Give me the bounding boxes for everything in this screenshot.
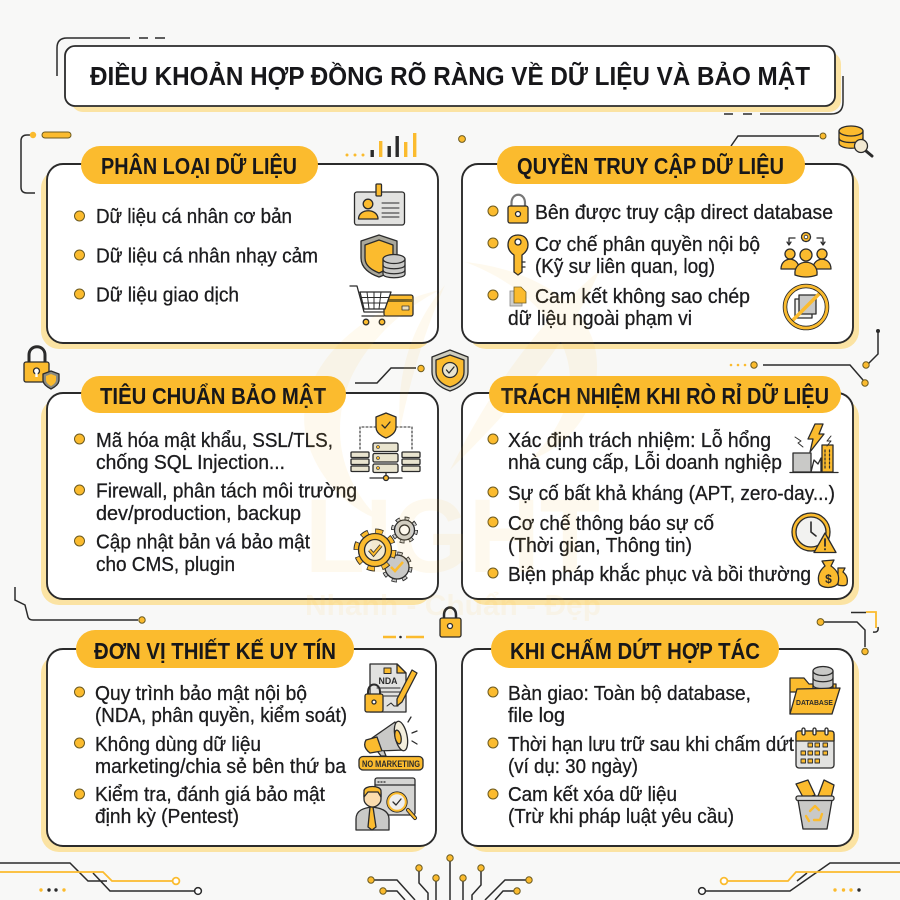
panel: phân loại dữ liệu xyxy=(41,146,438,349)
icon: money bags xyxy=(818,560,847,588)
title banner: ĐIỀU KHOẢN HỢP ĐỒNG RÕ RÀNG VỀ DỮ LIỆU VÀ BẢO MẬT xyxy=(90,61,810,91)
bullet list: chống SQL Injection... xyxy=(96,451,285,474)
bullet list: Kiểm tra, đánh giá bảo mật xyxy=(95,783,325,806)
icon: calendar xyxy=(796,728,834,768)
icon: database folder: DATABASE xyxy=(796,698,833,707)
bullet list: (Thời gian, Thông tin) xyxy=(508,534,692,557)
bullet list: Cơ chế thông báo sự cố xyxy=(508,512,714,535)
heading: khi chấm dứt hợp tác xyxy=(491,630,779,668)
panel: quyền truy cập dữ liệu xyxy=(462,146,859,349)
bullet list: định kỳ (Pentest) xyxy=(95,805,239,828)
bullet list: Dữ liệu cá nhân nhạy cảm xyxy=(96,244,318,268)
icon: padlock xyxy=(508,195,528,223)
icon: cart and credit card xyxy=(350,286,413,325)
icon: documents xyxy=(510,287,526,306)
title banner xyxy=(65,46,841,112)
bullet list: nhà cung cấp, Lỗi doanh nghiệp xyxy=(508,451,782,474)
bullet list xyxy=(74,205,318,306)
bullet list: Sự cố bất khả kháng (APT, zero-day...) xyxy=(508,482,835,505)
watermark: LIGHT logo: Nhanh - Chuẩn - Đẹp xyxy=(305,590,601,622)
bullet list: (Kỹ sư liên quan, log) xyxy=(535,255,715,278)
panel: trách nhiệm khi rò rỉ dữ liệu xyxy=(462,376,859,605)
bullet list: Không dùng dữ liệu xyxy=(95,733,261,756)
icon: no marketing megaphone: NO MARKETING xyxy=(362,759,420,769)
bullet list: (ví dụ: 30 ngày) xyxy=(508,755,638,778)
icon: key xyxy=(508,235,528,275)
bullet list: Xác định trách nhiệm: Lỗ hổng xyxy=(508,429,771,452)
bullet list: Bàn giao: Toàn bộ database, xyxy=(508,682,751,705)
heading: phân loại dữ liệu xyxy=(81,146,318,184)
heading: trách nhiệm khi rò rỉ dữ liệu: TRÁCH NHIỆM KHI RÒ RỈ DỮ LIỆU xyxy=(501,381,829,409)
heading: đơn vị thiết kế uy tín xyxy=(76,630,354,668)
bullet list: Dữ liệu cá nhân cơ bản xyxy=(96,205,292,228)
icon: money bags: $ xyxy=(825,572,832,586)
icon: clock with warning xyxy=(792,513,836,552)
icon: central shield xyxy=(432,350,468,391)
bullet list: Cam kết xóa dữ liệu xyxy=(508,783,677,806)
panel: tiêu chuẩn bảo mật xyxy=(41,376,438,605)
icon: secured servers xyxy=(351,413,420,480)
bullet list: Mã hóa mật khẩu, SSL/TLS, xyxy=(96,429,333,452)
heading: tiêu chuẩn bảo mật xyxy=(81,376,346,413)
heading: quyền truy cập dữ liệu xyxy=(497,146,805,184)
icon: id card xyxy=(354,184,404,225)
icon: auditor with magnifier xyxy=(356,778,415,830)
icon: shield with database xyxy=(361,235,405,278)
bullet list: Cơ chế phân quyền nội bộ xyxy=(535,233,760,256)
icon: database folder xyxy=(790,666,840,714)
icon: no marketing megaphone xyxy=(359,717,423,770)
icon: lock with shield xyxy=(24,347,59,389)
bullet list: dữ liệu ngoài phạm vi xyxy=(508,307,692,330)
bullet list xyxy=(74,682,347,828)
panel: khi chấm dứt hợp tác xyxy=(462,630,859,852)
bullet list: cho CMS, plugin xyxy=(96,553,235,576)
bullet list: Quy trình bảo mật nội bộ xyxy=(95,682,307,705)
bullet list: marketing/chia sẻ bên thứ ba xyxy=(95,755,347,778)
heading: quyền truy cập dữ liệu: QUYỀN TRUY CẬP DỮ LIỆU xyxy=(517,152,784,179)
bullet list: Cam kết không sao chép xyxy=(535,285,750,308)
bullet list xyxy=(488,429,835,586)
icon: central lock xyxy=(440,608,461,637)
icon: gears with checkmarks xyxy=(357,519,416,580)
icon: no copying xyxy=(785,286,827,328)
bullet list xyxy=(488,682,794,828)
bullet list: Thời hạn lưu trữ sau khi chấm dứt xyxy=(508,733,794,756)
icon: signal bars xyxy=(346,133,416,157)
heading: phân loại dữ liệu: PHÂN LOẠI DỮ LIỆU xyxy=(101,152,297,179)
bullet list: Cập nhật bản vá bảo mật xyxy=(96,530,310,554)
bullet list: dev/production, backup xyxy=(96,502,301,525)
watermark: LIGHT logo: LIGHT xyxy=(305,478,600,595)
heading: khi chấm dứt hợp tác: KHI CHẤM DỨT HỢP TÁC xyxy=(510,637,760,664)
heading: trách nhiệm khi rò rỉ dữ liệu xyxy=(489,376,841,413)
bullet list: (Trừ khi pháp luật yêu cầu) xyxy=(508,805,734,828)
icon: lightning over buildings xyxy=(790,424,838,472)
icon: team with gear xyxy=(781,232,831,277)
watermark: LIGHT logo xyxy=(304,262,601,622)
heading: tiêu chuẩn bảo mật: TIÊU CHUẨN BẢO MẬT xyxy=(100,381,326,409)
bullet list xyxy=(74,429,357,576)
bullet list xyxy=(488,201,833,330)
icon: NDA document: NDA xyxy=(378,676,398,687)
bullet list: Dữ liệu giao dịch xyxy=(96,284,239,306)
icon: NDA document xyxy=(365,664,417,712)
bullet list: file log xyxy=(508,704,565,727)
heading: đơn vị thiết kế uy tín: ĐƠN VỊ THIẾT KẾ UY TÍN xyxy=(94,637,336,664)
panel: đơn vị thiết kế uy tín xyxy=(41,630,436,852)
icon: recycle bin with documents xyxy=(796,780,834,829)
icon: database search xyxy=(839,126,872,156)
bullet list: Firewall, phân tách môi trường xyxy=(96,480,357,502)
bullet list: Bên được truy cập direct database xyxy=(535,201,833,224)
bullet list: Biện pháp khắc phục và bồi thường xyxy=(508,563,811,586)
bullet list: (NDA, phân quyền, kiểm soát) xyxy=(95,704,347,727)
